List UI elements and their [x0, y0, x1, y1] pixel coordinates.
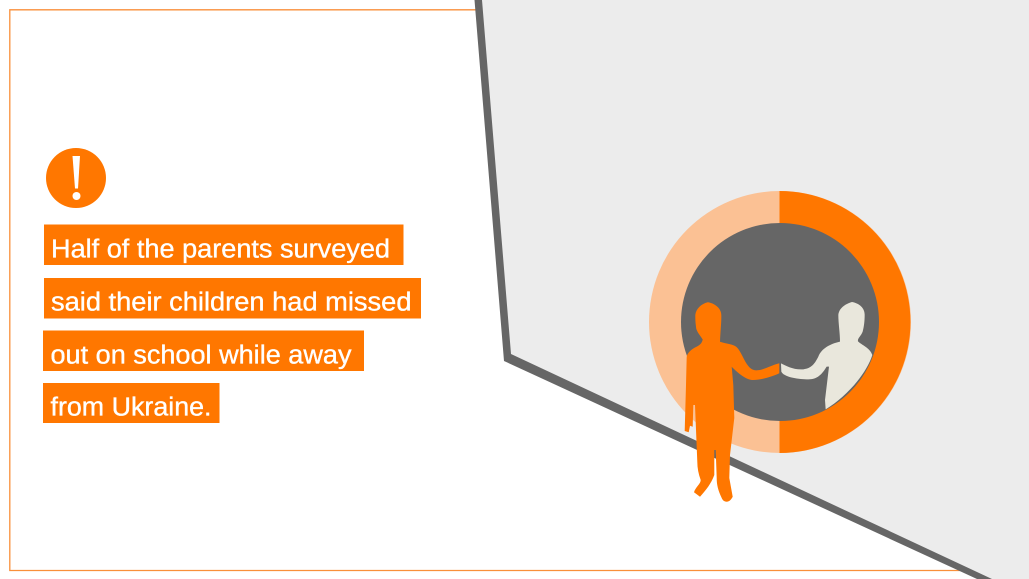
line 3: [43, 330, 364, 371]
line 2: [44, 278, 421, 318]
wall outline: [474, 0, 992, 579]
line 4: [43, 383, 220, 423]
line 1: Half of the parents surveyed: [51, 236, 390, 264]
line 4: from Ukraine.: [50, 394, 211, 422]
line 1: [44, 224, 404, 265]
grey wall panel: [478, 0, 1029, 579]
line 2: said their children had missed: [51, 289, 412, 317]
silhouette: adult reflection: [781, 302, 872, 409]
donut chart: half of parents: [649, 191, 911, 453]
alert icon: [46, 148, 106, 208]
line 3: out on school while away: [50, 341, 352, 369]
statement text: [43, 224, 421, 423]
silhouette: orange child: [685, 302, 779, 502]
